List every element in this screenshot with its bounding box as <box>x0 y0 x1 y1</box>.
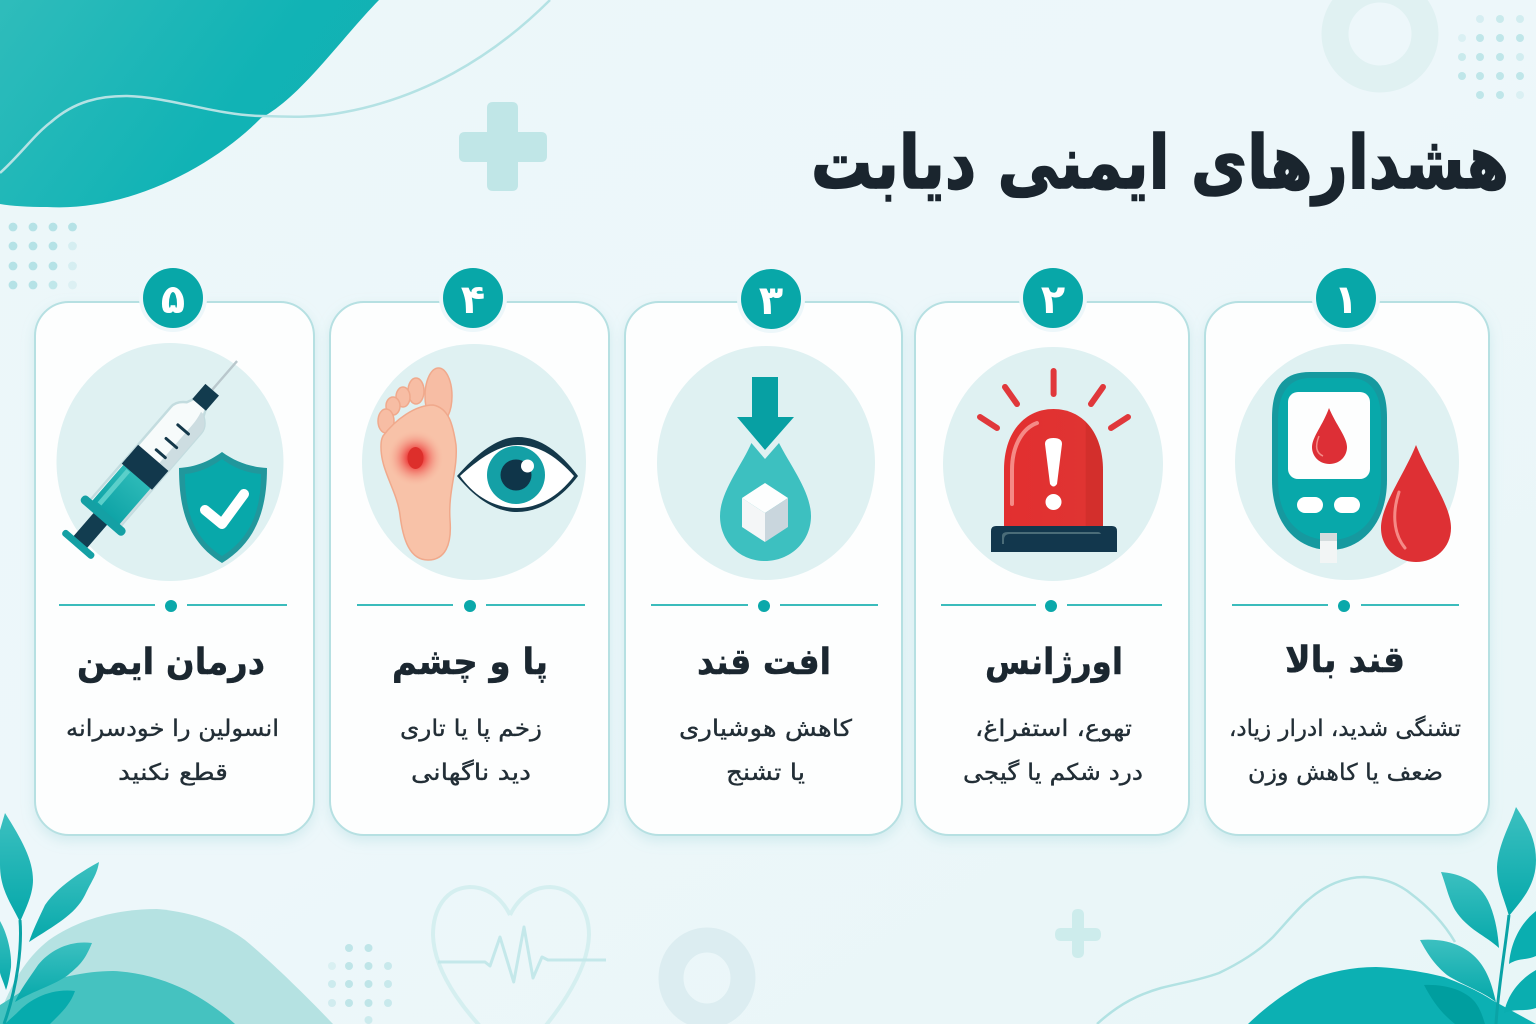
panel: item 1 high sugar <box>1205 264 1489 835</box>
divider <box>1232 600 1459 612</box>
description <box>66 716 279 786</box>
heading: افت قند <box>697 642 831 683</box>
decorative wave: top <box>0 0 550 173</box>
icon circle <box>657 346 875 580</box>
description: دید ناگهانی <box>411 759 531 786</box>
badge 5 <box>139 264 207 332</box>
heading: قند بالا <box>1285 640 1405 681</box>
panel: item 5 safe treatment <box>35 264 314 835</box>
icon: down arrow <box>737 377 794 450</box>
dots: top right <box>1458 15 1524 99</box>
description: زخم پا یا تاری <box>400 716 542 742</box>
leaves: bottom right <box>1420 807 1536 1024</box>
description: کاهش هوشیاری <box>679 716 852 742</box>
badge 4: ۴ <box>461 277 485 323</box>
icon: foot with wound <box>378 368 456 560</box>
description: تشنگی شدید، ادرار زیاد، <box>1229 715 1461 742</box>
icon: eye <box>457 437 578 512</box>
badge 4 <box>439 264 507 332</box>
divider <box>651 600 878 612</box>
icon: heart with pulse line <box>433 887 606 1024</box>
card <box>1205 302 1489 835</box>
icon: shield with check <box>179 452 267 563</box>
leaves: bottom left <box>0 813 99 1024</box>
icon circle <box>362 344 586 580</box>
badge 3: ۳ <box>759 278 783 324</box>
icon: sugar cube <box>742 483 788 542</box>
panel: item 2 emergency <box>915 264 1189 835</box>
description <box>679 716 852 786</box>
badge 1: ۱ <box>1334 277 1358 323</box>
divider <box>357 600 585 612</box>
dots: bottom center <box>328 944 392 1024</box>
description: قطع نکنید <box>118 760 228 786</box>
description: انسولین را خودسرانه <box>66 716 279 742</box>
description <box>400 716 542 786</box>
divider <box>59 600 287 612</box>
icon: siren base <box>991 526 1117 552</box>
dots: top left <box>9 223 77 289</box>
decorative ring: top right <box>1335 0 1425 79</box>
icon circle <box>56 343 284 581</box>
panel: item 3 sugar drop <box>625 265 902 835</box>
icon: siren dome <box>1004 409 1103 527</box>
bottom left blobs <box>0 909 333 1024</box>
description: ضعف یا کاهش وزن <box>1248 760 1443 786</box>
icon: small plus <box>1055 909 1101 958</box>
decorative blob: top left <box>0 0 379 207</box>
decorative ring: bottom <box>671 940 743 1016</box>
icon: teal drop <box>720 443 811 561</box>
description: درد شکم یا گیجی <box>963 759 1143 786</box>
teal blob: bottom right <box>1248 967 1536 1024</box>
icon: glucose meter <box>1272 372 1387 563</box>
badge 3 <box>737 265 805 333</box>
panel: item 4 foot and eye <box>330 264 609 835</box>
badge 2 <box>1019 264 1087 332</box>
heading: اورژانس <box>985 642 1123 683</box>
card <box>35 302 314 835</box>
icon: syringe <box>55 343 258 565</box>
divider <box>941 600 1162 612</box>
icon circle <box>1235 344 1459 580</box>
description: تهوع، استفراغ، <box>975 716 1132 742</box>
heading: پا و چشم <box>392 642 548 683</box>
card <box>330 302 609 835</box>
card <box>625 302 902 835</box>
card <box>915 302 1189 835</box>
description <box>1229 715 1461 786</box>
badge 5: ۵ <box>161 277 185 323</box>
icon: siren rays <box>980 371 1128 428</box>
heading: درمان ایمن <box>77 642 265 683</box>
decorative wave: bottom right <box>1097 877 1455 1024</box>
badge 1 <box>1312 264 1380 332</box>
description <box>963 716 1143 786</box>
icon: blood drop <box>1381 445 1451 562</box>
description: یا تشنج <box>726 760 805 786</box>
badge 2: ۲ <box>1041 277 1065 323</box>
icon circle <box>943 347 1163 581</box>
icon: large plus <box>459 102 547 191</box>
